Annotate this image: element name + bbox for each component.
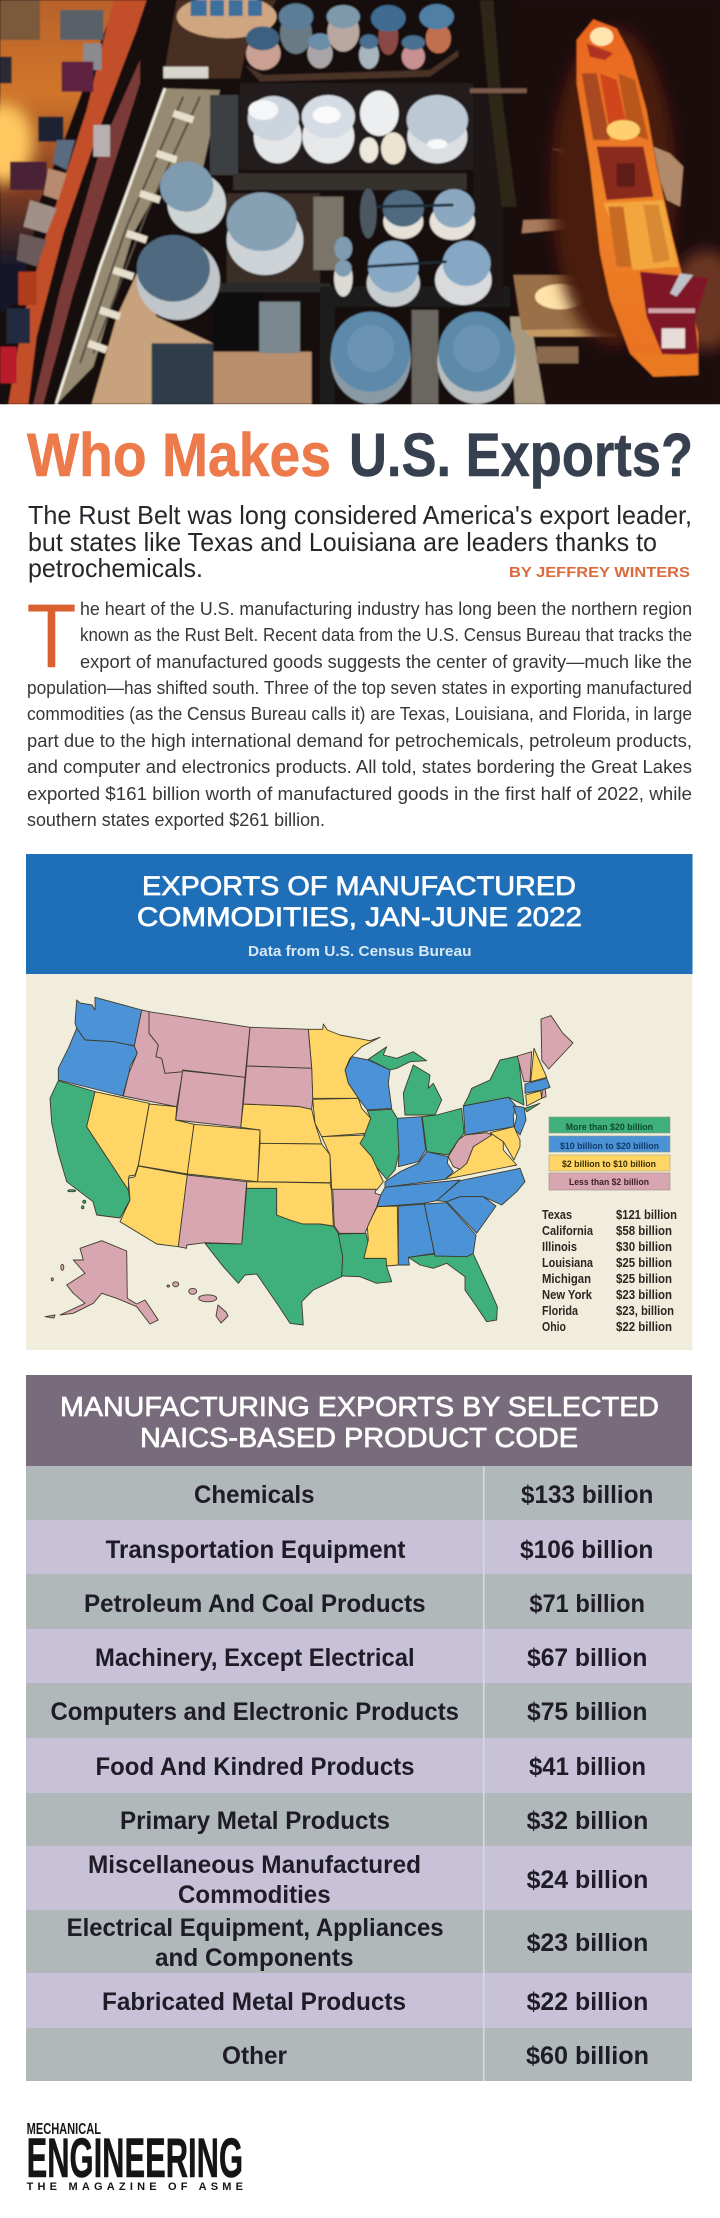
- drop cap: T: [26, 586, 76, 687]
- subheading: [28, 500, 692, 583]
- table values: $22 billion: [527, 1988, 648, 2016]
- top states list: Illinois: [542, 1240, 577, 1254]
- table row backgrounds: [26, 1466, 692, 2081]
- table values: $23 billion: [527, 1929, 648, 1957]
- table product labels: and Components: [155, 1944, 354, 1972]
- states: $10 billion to $20 billion: [58, 997, 550, 1265]
- top states list: $25 billion: [616, 1272, 672, 1286]
- top states list: New York: [542, 1288, 592, 1302]
- table header: [26, 1375, 692, 1466]
- table product labels: Commodities: [178, 1881, 331, 1909]
- top states list: $23, billion: [616, 1304, 674, 1318]
- map panel header: EXPORTS OF MANUFACTURED: [142, 871, 576, 901]
- body text: population—has shifted south. Three of the top seven states in exporting manufactured: [27, 678, 692, 698]
- legend: Less than $2 billion: [569, 1177, 649, 1188]
- subheading: The Rust Belt was long considered America's export leader,: [28, 500, 692, 530]
- logo: Mechanical Engineering: ENGINEERING: [27, 2126, 243, 2189]
- top states list: Louisiana: [542, 1256, 594, 1270]
- top states list: $23 billion: [616, 1288, 672, 1302]
- table values: $133 billion: [521, 1481, 653, 1509]
- title: [27, 421, 693, 489]
- body text: part due to the high international demand for petrochemicals, petroleum products,: [27, 731, 692, 751]
- body text: [27, 599, 692, 830]
- table product labels: Food And Kindred Products: [96, 1753, 414, 1781]
- legend: [549, 1117, 670, 1190]
- logo: Mechanical Engineering: [27, 2121, 243, 2193]
- map panel header: [26, 854, 692, 974]
- table product labels: Other: [222, 2042, 287, 2070]
- table header: MANUFACTURING EXPORTS BY SELECTED: [60, 1391, 659, 1422]
- top states list: $121 billion: [616, 1208, 677, 1222]
- table values: $41 billion: [529, 1753, 646, 1781]
- subheading: but states like Texas and Louisiana are leaders thanks to: [28, 527, 657, 557]
- body text: exported $161 billion worth of manufactured goods in the first half of 2022, while: [27, 784, 692, 804]
- California islands: [68, 1190, 86, 1209]
- body text: southern states exported $261 billion.: [27, 810, 325, 830]
- table product labels: Computers and Electronic Products: [50, 1698, 459, 1726]
- top states list: $25 billion: [616, 1256, 672, 1270]
- map panel header: Data from U.S. Census Bureau: [248, 943, 472, 960]
- table product labels: Fabricated Metal Products: [102, 1988, 406, 2016]
- body text: commodities (as the Census Bureau calls it) are Texas, Louisiana, and Florida, in large: [27, 704, 692, 724]
- logo: Mechanical Engineering: MECHANICAL: [27, 2121, 101, 2138]
- table values: $60 billion: [526, 2042, 649, 2070]
- table product labels: Chemicals: [194, 1481, 314, 1509]
- title: Who Makes: [27, 421, 331, 489]
- table values: $75 billion: [527, 1698, 647, 1726]
- table product labels: Electrical Equipment, Appliances: [67, 1914, 444, 1942]
- table product labels: Machinery, Except Electrical: [95, 1644, 415, 1672]
- top states list: Florida: [542, 1304, 579, 1318]
- legend: $2 billion to $10 billion: [562, 1159, 656, 1170]
- legend: $10 billion to $20 billion: [560, 1141, 659, 1152]
- subheading: petrochemicals.: [28, 553, 203, 583]
- byline: BY JEFFREY WINTERS: [509, 564, 690, 581]
- table product labels: Petroleum And Coal Products: [84, 1590, 426, 1618]
- body text: export of manufactured goods suggests the center of gravity—much like the: [80, 652, 692, 672]
- body text: and computer and electronics products. All told, states bordering the Great Lakes: [27, 757, 692, 777]
- top states list: Ohio: [542, 1320, 566, 1334]
- table values: $106 billion: [520, 1536, 653, 1564]
- top states list: $22 billion: [616, 1320, 672, 1334]
- table product labels: [50, 1481, 459, 2070]
- map panel header: COMMODITIES, JAN-JUNE 2022: [137, 902, 582, 932]
- top states list: California: [542, 1224, 594, 1238]
- logo: Mechanical Engineering: THE MAGAZINE OF ASME: [27, 2181, 243, 2193]
- table values: [520, 1481, 653, 2070]
- states: $2 billion to $10 billion: [87, 1024, 547, 1266]
- table values: $67 billion: [527, 1644, 647, 1672]
- states: less than $2 billion: [45, 1010, 573, 1324]
- body text: he heart of the U.S. manufacturing industry has long been the northern region: [80, 599, 692, 619]
- top states list: Michigan: [542, 1272, 591, 1286]
- states: more than $20 billion: [50, 1047, 540, 1325]
- table values: $24 billion: [527, 1866, 648, 1894]
- top states list: [542, 1208, 677, 1334]
- legend: More than $20 billion: [566, 1122, 653, 1133]
- US states map: [45, 997, 573, 1325]
- table product labels: Transportation Equipment: [106, 1536, 406, 1564]
- map panel background: [26, 974, 692, 1350]
- body text: known as the Rust Belt. Recent data from the U.S. Census Bureau that tracks the: [80, 625, 692, 645]
- top states list: $58 billion: [616, 1224, 672, 1238]
- panel: product code table: [26, 1375, 692, 2081]
- table values: $32 billion: [527, 1807, 648, 1835]
- photo: aerial view of storage tanks and tanker at night: [0, 0, 720, 404]
- table header: NAICS-BASED PRODUCT CODE: [140, 1422, 578, 1453]
- table values: $71 billion: [529, 1590, 645, 1618]
- table product labels: Primary Metal Products: [120, 1807, 390, 1835]
- table product labels: Miscellaneous Manufactured: [88, 1851, 421, 1879]
- panel: export map: [26, 854, 692, 1350]
- top states list: Texas: [542, 1208, 572, 1222]
- top states list: $30 billion: [616, 1240, 672, 1254]
